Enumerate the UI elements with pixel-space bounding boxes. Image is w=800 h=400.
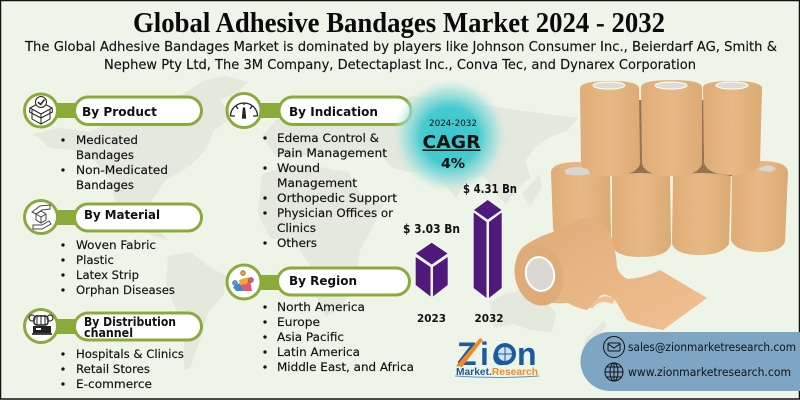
list: by product: Bandages (76, 148, 134, 162)
subtitle: The Global Adhesive Bandages Market is dominated by players like Johnson Consumer Inc., Beierdarf AG, Smith & (24, 40, 778, 55)
list: by distribution channel: Retail Stores (76, 362, 150, 376)
list: by material: Plastic (76, 253, 114, 267)
logo: zion market research: Zion (457, 336, 537, 372)
list: by material: Woven Fabric (76, 238, 156, 252)
panel: by distribution channel (24, 310, 202, 391)
icon: orange arrow (456, 338, 483, 367)
list: by product (61, 133, 168, 192)
list: by indication: Pain Management (277, 146, 387, 160)
title: Global Adhesive Bandages Market 2024 - 2032 (133, 7, 665, 39)
fold in strip (590, 296, 615, 309)
logo: zion market research: Market.Research (456, 366, 538, 378)
icon: hands holding cube (32, 205, 51, 229)
list: by distribution channel: Hospitals & Clinics (76, 347, 184, 361)
list: by region: Latin America (277, 345, 360, 359)
list: by material: Orphan Diseases (76, 283, 175, 297)
list: by indication: Orthopedic Support (277, 191, 397, 205)
list: by indication: Physician Offices or (277, 206, 393, 220)
icon: delivery van and pins (29, 315, 53, 335)
icon: globe (605, 363, 623, 381)
bar 2032 (474, 200, 502, 298)
heading: by region: By Region (289, 274, 357, 289)
list: by region: North America (277, 300, 365, 314)
list: by indication: Wound (277, 161, 320, 175)
gaps between rolls (610, 100, 735, 176)
heading: by indication: By Indication (289, 105, 378, 120)
bar chart: market size (403, 181, 517, 325)
list: by region: Europe (277, 315, 320, 329)
image: bandage rolls (508, 80, 788, 330)
panel: by region (227, 265, 414, 374)
list: by material (61, 238, 175, 297)
icon: box with check (30, 96, 52, 124)
loose roll with unrolled strip (515, 218, 707, 330)
loose roll end face (508, 239, 570, 311)
list: by indication: Edema Control & (277, 131, 379, 145)
icon: region map with pins (232, 271, 254, 291)
bar 2023 (416, 243, 448, 296)
list: by indication: Others (277, 236, 317, 250)
heading: by distribution channel: By Distribution (84, 315, 176, 330)
website address: www.zionmarketresearch.com (628, 365, 791, 379)
icon: globe (494, 343, 516, 365)
subtitle: Nephew Pty Ltd, The 3M Company, Detectaplast Inc., Conva Tec, and Dynarex Corporation (104, 58, 696, 73)
callout: cagr: 2024-2032 (429, 119, 477, 129)
panel: by product (24, 94, 202, 192)
panel: contact (580, 332, 800, 391)
world map background (33, 76, 606, 370)
heading: by material: By Material (84, 208, 160, 223)
heading: by distribution channel: channel (84, 326, 133, 341)
value: 2023: $ 3.03 Bn (403, 221, 460, 236)
icon: email (604, 336, 624, 358)
value: 2032: $ 4.31 Bn (463, 181, 517, 196)
callout: cagr (393, 79, 507, 193)
label: 2023: 2023 (417, 312, 446, 325)
list: by region: Asia Pacific (277, 330, 344, 344)
upper row of rolls (580, 80, 762, 176)
lower row of rolls (551, 161, 788, 257)
list: by product: Non-Medicated (76, 163, 168, 177)
callout: cagr: 4% (441, 156, 465, 172)
label: 2032: 2032 (474, 312, 504, 325)
list: by region (263, 300, 414, 374)
list: by material: Latex Strip (76, 268, 139, 282)
list: by product: Bandages (76, 178, 134, 192)
subtitle (24, 40, 778, 73)
panel: by indication (227, 94, 411, 250)
list: by region: Middle East, and Africa (277, 360, 414, 374)
image: bandage roll hubs (522, 82, 776, 294)
icon: gauge (230, 103, 258, 118)
list: by distribution channel: E-commerce (76, 377, 152, 391)
callout: cagr: CAGR (422, 132, 481, 153)
list: by indication: Management (277, 176, 357, 190)
list: by indication (263, 131, 397, 250)
list: by distribution channel (61, 347, 184, 391)
panel: by material (24, 200, 202, 297)
list: by product: Medicated (76, 133, 138, 147)
heading: by product: By Product (82, 105, 157, 120)
list: by indication: Clinics (277, 221, 316, 235)
heading: by distribution channel (84, 315, 176, 341)
